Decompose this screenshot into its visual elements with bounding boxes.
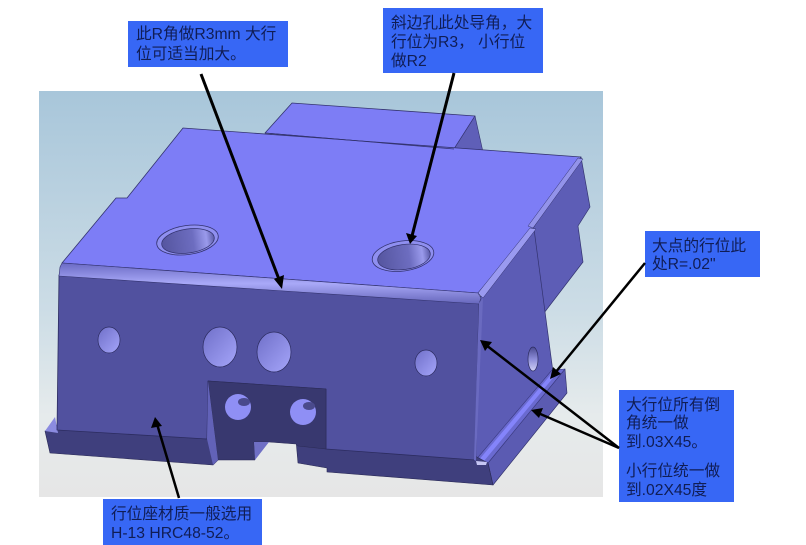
callout: material note: 行位座材质一般选用	[111, 505, 252, 523]
corner vertical chamfer	[474, 298, 483, 461]
base front strip: right	[296, 440, 493, 485]
callout: chamfer note: 大行位所有倒	[626, 396, 720, 414]
callout: material note: H-13 HRC48-52。	[111, 525, 239, 542]
callout: large-point slide note	[645, 231, 760, 277]
hole: front centre left	[203, 327, 237, 367]
callout: chamfer note	[619, 390, 734, 502]
back block front line	[265, 133, 454, 149]
arrow: hole note to hole	[406, 73, 454, 244]
rail highlight corner	[476, 461, 487, 465]
hole: notch right	[290, 399, 316, 425]
callout: chamfer note: 角统一做	[626, 414, 689, 432]
arrow: fillet note to top edge	[201, 74, 284, 289]
base right side	[488, 369, 567, 485]
front top fillet	[59, 263, 481, 304]
base rail top	[474, 369, 565, 463]
hole: front far left	[98, 327, 120, 353]
notch lower wedge	[254, 442, 269, 460]
front face	[57, 275, 479, 460]
right side face	[476, 229, 553, 461]
arrow: large-point note to rail	[550, 263, 645, 379]
callout: fillet note: 位可适当加大。	[136, 45, 246, 63]
hole: front centre right	[257, 332, 291, 372]
callout: fillet note: 此R角做R3mm 大行	[136, 25, 276, 43]
3D model: slide block	[45, 103, 590, 485]
arrow: material note to front face	[151, 417, 179, 498]
arrow: chamfer note to corner	[480, 340, 619, 448]
callout: angled hole note: 做R2	[391, 52, 427, 70]
rail light strip	[478, 372, 558, 461]
hole: top right	[370, 237, 436, 275]
base front strip: left	[45, 425, 218, 465]
3D render background	[39, 91, 603, 497]
right chamfer strip	[478, 228, 536, 298]
arrow: chamfer note to rail edge	[531, 408, 619, 448]
notch dark pocket	[208, 381, 326, 460]
callout: large-point slide note: 处R=.02"	[652, 255, 716, 273]
hole: front far right	[415, 350, 437, 376]
callout: angled hole note	[383, 8, 543, 73]
callout: chamfer note: 到.02X45度	[626, 481, 707, 499]
callout: chamfer note: 小行位统一做	[626, 462, 720, 480]
base corner left	[45, 417, 58, 433]
callout: large-point slide note: 大点的行位此	[652, 237, 746, 255]
hole: side	[528, 347, 538, 371]
callout: material note	[103, 499, 262, 545]
notch side wedge	[207, 381, 218, 465]
hole: top left	[155, 221, 220, 259]
back raised block	[265, 103, 483, 152]
far right stepped side	[530, 157, 590, 313]
callout: angled hole note: 斜边孔此处导角，大	[391, 14, 532, 32]
callout: fillet note	[128, 21, 288, 67]
callout: chamfer note: 到.03X45。	[626, 433, 707, 451]
top face	[62, 128, 581, 293]
hole: notch left	[225, 394, 251, 420]
callout: angled hole note: 行位为R3， 小行位	[391, 33, 525, 51]
